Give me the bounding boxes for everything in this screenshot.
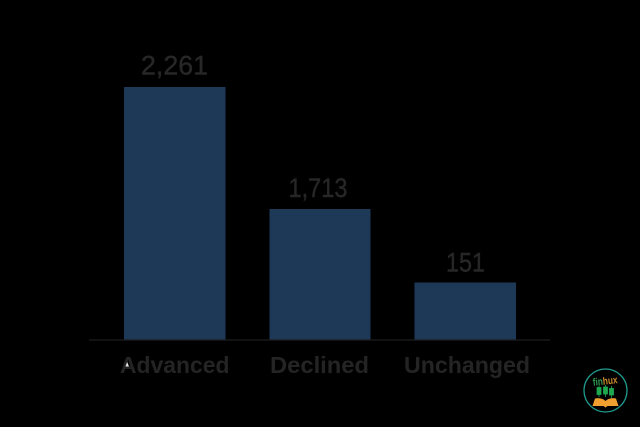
value label: 1,713: 1,713 (288, 173, 348, 203)
logo candlesticks (597, 385, 614, 398)
category label: Declined: Declined (270, 352, 369, 378)
small white mark on Advanced label (126, 362, 129, 366)
category label: Advanced: Advanced (120, 352, 230, 378)
category label: Unchanged: Unchanged (404, 352, 530, 378)
value label: 151: 151 (446, 248, 485, 278)
logo wordmark: finhux (592, 374, 618, 389)
value label: 2,261: 2,261 (141, 50, 208, 80)
icon: finhux logo (584, 369, 627, 412)
bar: Advanced (124, 87, 226, 340)
bar: Declined (270, 209, 370, 340)
logo open book (592, 398, 618, 408)
bar: Unchanged (414, 282, 516, 340)
